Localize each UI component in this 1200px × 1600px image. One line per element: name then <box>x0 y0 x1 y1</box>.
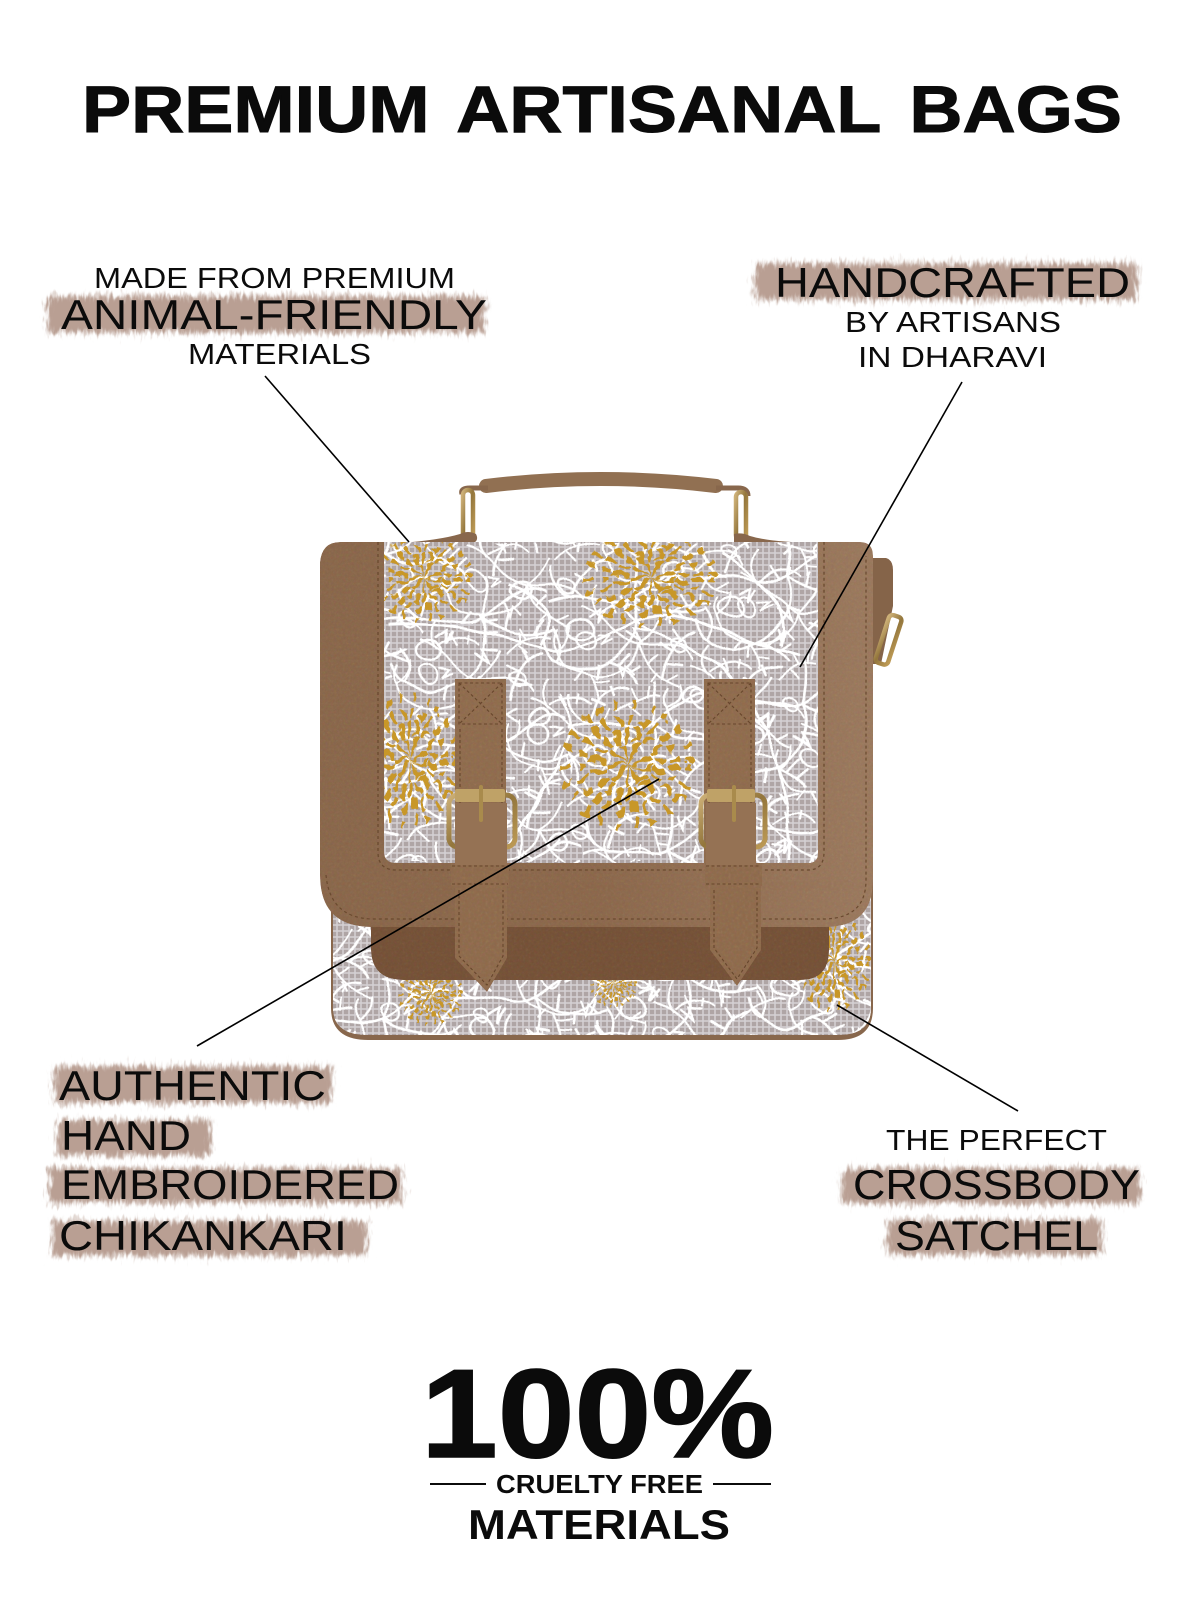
bag photo illustration <box>320 479 902 1040</box>
callout: handcrafted by artisans: IN DHARAVI <box>858 342 1047 374</box>
left buckle <box>449 787 515 865</box>
embroidered fabric panel <box>364 532 818 863</box>
lower embroidered body <box>331 880 873 1040</box>
yellow embroidery bursts <box>364 532 713 825</box>
callout: handcrafted by artisans: HANDCRAFTED <box>775 259 1130 306</box>
left strap <box>451 679 509 992</box>
badge: 100% cruelty free materials: CRUELTY FREE <box>496 1469 703 1499</box>
callout: authentic hand embroidered chikankari: HAND <box>61 1112 191 1159</box>
callout: authentic hand embroidered chikankari: EMBROIDERED <box>61 1161 399 1208</box>
title: PREMIUM ARTISANAL BAGS <box>82 72 1122 146</box>
callout: animal-friendly materials <box>48 263 487 371</box>
callout: perfect crossbody satchel <box>843 1125 1140 1259</box>
callout: handcrafted by artisans <box>756 259 1136 374</box>
callout line: chikankari <box>197 779 659 1046</box>
callout line: handcrafted <box>800 382 962 667</box>
callout: authentic hand embroidered chikankari: AUTHENTIC <box>59 1062 326 1109</box>
callout: authentic hand embroidered chikankari <box>50 1062 401 1259</box>
right buckle <box>701 787 765 865</box>
callout: animal-friendly materials: MATERIALS <box>188 339 371 371</box>
flap <box>320 542 873 927</box>
badge: 100% cruelty free materials: MATERIALS <box>468 1501 730 1548</box>
right strap <box>704 679 762 986</box>
callout: perfect crossbody satchel: CROSSBODY <box>853 1161 1140 1208</box>
front pocket <box>371 925 829 980</box>
shoulder strap tab and side buckle <box>868 558 902 666</box>
callout line: animal-friendly <box>265 376 409 542</box>
badge: 100% cruelty free materials: 100% <box>421 1343 774 1484</box>
callout: authentic hand embroidered chikankari: CHIKANKARI <box>59 1212 347 1259</box>
callout: perfect crossbody satchel: THE PERFECT <box>886 1125 1107 1157</box>
callout: animal-friendly materials: MADE FROM PREMIUM <box>94 263 455 295</box>
callout: animal-friendly materials: ANIMAL-FRIENDLY <box>61 291 487 338</box>
callout line: crossbody <box>837 1005 1018 1111</box>
callout: perfect crossbody satchel: SATCHEL <box>895 1212 1098 1259</box>
badge: 100% cruelty free materials <box>421 1343 774 1548</box>
handle <box>400 479 814 544</box>
callout: handcrafted by artisans: BY ARTISANS <box>845 307 1061 339</box>
